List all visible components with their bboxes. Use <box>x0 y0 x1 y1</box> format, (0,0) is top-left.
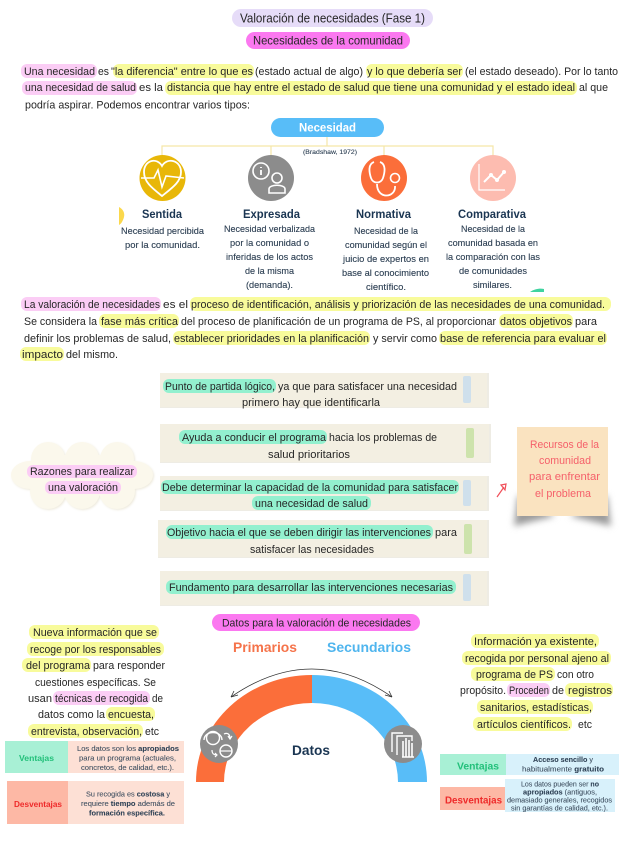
text block: definition of need: podría aspirar. Podemos encontrar varios tipos: <box>25 100 250 112</box>
text block: secondary data: Información ya existente, <box>474 636 597 648</box>
title: Valoración de necesidades (Fase 1) <box>240 10 425 26</box>
table: primary disadvantages: Desventajas <box>14 799 62 809</box>
column: Normativa: base al conocimiento <box>342 268 429 279</box>
table: secondary disadvantages <box>440 779 615 812</box>
reason 3: una necesidad de salud <box>255 498 368 510</box>
column: Expresada: Expresada <box>243 207 300 221</box>
citation: (Bradshaw, 1972) <box>303 149 357 156</box>
table: secondary advantages <box>440 754 619 775</box>
text block: assessment of needs: base de referencia para evaluar el <box>440 333 606 345</box>
column: Sentida: Sentida <box>142 207 182 221</box>
arrow: curved double-headed <box>231 669 392 697</box>
heading pill: Necesidad: Necesidad <box>299 120 356 134</box>
table: secondary advantages: Acceso sencillo y <box>533 757 594 764</box>
text block: primary data: datos como la <box>38 709 106 721</box>
heading: data for assessment <box>212 614 420 631</box>
text block: secondary data: recogida por personal ajeno al <box>465 653 609 665</box>
reason 4 <box>158 520 489 558</box>
column: Sentida <box>121 207 205 251</box>
table: secondary disadvantages: Los datos pueden ser no <box>521 782 599 788</box>
column: Comparativa <box>446 207 540 291</box>
reason 3 <box>160 476 489 511</box>
text block: assessment of needs: para <box>575 316 598 328</box>
icon: line chart, Comparativa <box>470 155 516 201</box>
label: Datos: Datos <box>292 742 330 758</box>
text block: primary data: usan <box>28 693 52 705</box>
text block: assessment of needs: impacto <box>22 349 63 361</box>
text block: assessment of needs: definir los problemas de salud, <box>24 333 171 345</box>
text block: secondary data: artículos científicos. <box>477 719 571 731</box>
reason 2 <box>160 424 491 463</box>
icon: stethoscope, Normativa <box>361 155 407 201</box>
table: primary disadvantages <box>7 781 184 824</box>
label: Primarios: Primarios <box>233 639 297 655</box>
text block: assessment of needs: fase más crítica <box>101 316 179 328</box>
text block: secondary data: con otro <box>557 669 594 681</box>
column: Sentida: Necesidad percibida <box>121 226 205 237</box>
column: Comparativa: Comparativa <box>458 207 526 221</box>
table: primary disadvantages: requiere tiempo además de <box>81 801 175 808</box>
text block: primary data: entrevista, observación, <box>31 726 142 738</box>
text block: definition of need: distancia que hay entre el estado de salud que tiene una comunidad y el estado ideal <box>167 82 575 94</box>
sticky note: community resources: comunidad <box>539 455 591 467</box>
reason 4: para <box>435 527 458 539</box>
heading pill: Necesidad <box>271 118 384 137</box>
table: secondary disadvantages: sin garantías de calidad, etc.). <box>511 806 608 812</box>
reason 2: hacia los problemas de <box>329 432 437 444</box>
subtitle: necesidades de la comunidad: Necesidades de la comunidad <box>253 34 403 48</box>
reason 1: Punto de partida lógico, <box>165 381 275 393</box>
sticky note: community resources: el problema <box>535 488 592 500</box>
column: Normativa: juicio de expertos en <box>342 254 429 265</box>
cloud: reasons for assessment: una valoración <box>48 482 118 494</box>
reason 4: Objetivo hacia el que se deben dirigir las intervenciones <box>167 527 431 539</box>
text block: assessment of needs <box>20 297 611 361</box>
text block: secondary data: Proceden <box>509 685 549 697</box>
column: Normativa: Normativa <box>356 207 411 221</box>
text block: definition of need: es la <box>139 82 164 94</box>
connector lines <box>162 137 493 156</box>
text block: definition of need: al que <box>579 82 608 94</box>
diagram: types of need (Bradshaw) <box>121 118 540 293</box>
text block: primary data: cuestiones específicas. Se <box>35 677 156 689</box>
column: Normativa: Necesidad de la <box>354 226 419 237</box>
text block: definition of need: "la diferencia" entre lo que es <box>111 66 253 78</box>
text block: primary data: encuesta, <box>108 709 154 721</box>
reason 2: Ayuda a conducir el programa <box>182 432 327 444</box>
text block: secondary data: etc <box>578 719 592 731</box>
sticky note: community resources: Recursos de la <box>530 439 600 451</box>
table: primary advantages: Los datos son los apropiados <box>77 746 179 753</box>
column: Comparativa: la comparación con las <box>446 252 540 263</box>
text block: definition of need: (el estado deseado). Por lo tanto <box>465 66 618 78</box>
chart: half-ring of data types <box>196 669 427 782</box>
text block: definition of need: (estado actual de algo) <box>255 66 363 78</box>
column: Comparativa: similares. <box>473 280 512 291</box>
text block: primary data: recoge por los responsables <box>30 644 161 656</box>
text block: definition of need <box>21 64 618 112</box>
column: Expresada: inferidas de los actos <box>226 252 313 263</box>
column: Expresada: por la comunidad o <box>230 238 309 249</box>
text block: assessment of needs: del proceso de planificación de un programa de PS, al proporcionar <box>181 316 496 328</box>
reason 5: Fundamento para desarrollar las intervenciones necesarias <box>169 582 453 594</box>
column: Comparativa: Necesidad de la <box>461 224 526 235</box>
text block: assessment of needs: es el <box>163 299 188 311</box>
table: secondary disadvantages: Desventajas <box>445 796 502 806</box>
sticky note: community resources: para enfrentar <box>529 471 600 483</box>
column: Expresada <box>224 207 316 291</box>
table: secondary advantages: habitualmente gratuito <box>522 766 604 774</box>
column: Expresada: de la misma <box>245 266 295 277</box>
text block: assessment of needs: del mismo. <box>66 349 118 361</box>
reason 1: primero hay que identificarla <box>242 397 381 409</box>
sticky note: community resources <box>514 427 611 526</box>
text block: primary data: del programa <box>26 660 91 672</box>
text block: assessment of needs: Se considera la <box>24 316 98 328</box>
text block: primary data <box>22 625 165 738</box>
text block: primary data: técnicas de recogida <box>55 693 149 705</box>
column: Comparativa: comunidad basada en <box>448 238 538 249</box>
table: primary advantages <box>5 741 184 773</box>
text block: secondary data: registros <box>568 685 613 697</box>
column: Comparativa: de comunidades <box>459 266 527 277</box>
reason 3: Debe determinar la capacidad de la comunidad para satisfacer <box>162 482 458 494</box>
table: secondary disadvantages: demasiado generales, recogidos <box>507 798 613 804</box>
table: primary disadvantages: Su recogida es costosa y <box>86 792 171 798</box>
text block: definition of need: y lo que debería ser <box>367 66 462 78</box>
column: Normativa: comunidad según el <box>345 240 427 251</box>
text block: secondary data: propósito. <box>460 685 506 697</box>
text block: assessment of needs: La valoración de necesidades <box>24 299 160 311</box>
icon: person with info bubble, Expresada <box>248 155 294 201</box>
text block: definition of need: Una necesidad <box>24 66 95 78</box>
table: primary advantages: Ventajas <box>19 753 54 763</box>
reason 1 <box>160 373 489 409</box>
text block: secondary data: programa de PS <box>476 669 553 681</box>
column: Normativa: científico. <box>366 282 406 293</box>
column: Expresada: Necesidad verbalizada <box>224 224 316 235</box>
reason 2: salud prioritarios <box>268 449 351 461</box>
cloud: reasons for assessment <box>11 442 153 509</box>
table: secondary advantages: Ventajas <box>457 762 499 772</box>
table: primary disadvantages: formación específica. <box>89 810 165 818</box>
table: primary advantages: concretos, de calidad, etc.). <box>81 765 174 772</box>
text block: definition of need: una necesidad de salud <box>25 82 136 94</box>
text block: primary data: Nueva información que se <box>33 627 157 639</box>
reason 5 <box>160 571 489 606</box>
table: primary advantages: para un programa (actuales, <box>79 756 176 762</box>
text block: assessment of needs: y servir como <box>373 333 437 345</box>
table: secondary disadvantages: apropiados (antiguos, <box>523 790 597 796</box>
decoration: green fragment <box>530 289 544 292</box>
text block: primary data: para responder <box>93 660 165 672</box>
text block: primary data: etc <box>145 726 159 738</box>
column: Expresada: (demanda). <box>246 280 293 291</box>
arrow: to sticky note <box>497 484 506 497</box>
heading: data for assessment: Datos para la valoración de necesidades <box>222 618 411 630</box>
column: Sentida: por la comunidad. <box>125 240 200 251</box>
label: Secundarios: Secundarios <box>327 639 411 655</box>
text block: secondary data: sanitarios, estadísticas, <box>480 702 592 714</box>
text block: secondary data <box>460 634 613 731</box>
text block: primary data: de <box>152 693 163 705</box>
text block: secondary data: de <box>552 685 564 697</box>
text block: assessment of needs: datos objetivos <box>500 316 572 328</box>
column: Normativa <box>342 207 429 293</box>
reason 1: ya que para satisfacer una necesidad <box>278 381 457 393</box>
icon: people exchanging <box>200 725 238 763</box>
icon: heart, Sentida <box>140 155 186 201</box>
icon: hand on documents <box>384 725 422 763</box>
cloud: reasons for assessment: Razones para realizar <box>30 466 134 478</box>
decoration: yellow fragment <box>119 207 124 225</box>
text block: assessment of needs: proceso de identificación, análisis y priorización de las necesidades de una comunidad. <box>191 299 605 311</box>
reason 4: satisfacer las necesidades <box>250 544 374 556</box>
text block: definition of need: es <box>98 66 109 78</box>
text block: assessment of needs: establecer prioridades en la planificación <box>174 333 369 345</box>
